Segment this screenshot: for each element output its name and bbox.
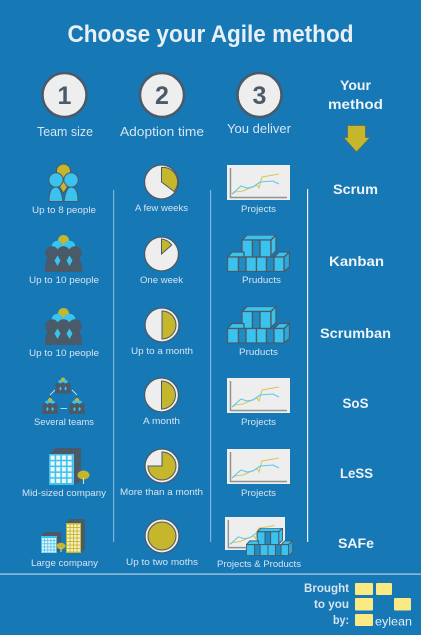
label: up to a month: Up to a month: [131, 346, 193, 357]
footer credit text: by:: [333, 613, 349, 627]
step 2: adoption time heading: [120, 73, 204, 139]
label: up to 8 people: Up to 8 people: [32, 205, 96, 216]
label: pruducts: Pruducts: [242, 275, 281, 286]
icon: up to 8 people: [49, 164, 78, 202]
icon: up to 10 people: [45, 235, 82, 272]
footer credit text: to you: [314, 597, 349, 611]
icon: several teams: [42, 378, 85, 414]
pie: more than a month: [145, 449, 179, 483]
method: sos: SoS: [342, 395, 368, 411]
method: kanban: Kanban: [329, 253, 384, 269]
pie: one week: [144, 237, 178, 271]
title: Choose your Agile method: [68, 21, 354, 48]
logo: eylean: eylean: [375, 614, 412, 628]
method: less: LeSS: [340, 465, 373, 481]
your method heading: [328, 77, 383, 112]
label: projects and products: Projects & Products: [217, 559, 301, 570]
step 2: adoption time heading: Adoption time: [120, 124, 204, 139]
label: one week: One week: [140, 275, 183, 286]
label: up to two moths: Up to two moths: [126, 557, 198, 568]
label: large company: Large company: [31, 558, 98, 569]
label: projects (less): Projects: [241, 488, 276, 499]
footer credit text: [304, 581, 349, 627]
chart icon: less projects: [227, 449, 290, 484]
label: up to 10 people (second): Up to 10 people: [29, 348, 99, 359]
pie: up to a month: [145, 308, 179, 342]
arrow: down to methods: [344, 126, 370, 152]
method: scrum: Scrum: [333, 181, 378, 197]
label: projects (sos): Projects: [241, 417, 276, 428]
label: several teams: Several teams: [34, 417, 94, 428]
label: a few weeks: A few weeks: [135, 203, 188, 214]
step 1: team size heading: [37, 73, 93, 139]
method: safe: SAFe: [338, 535, 374, 551]
icon: mid-sized company: [49, 448, 90, 485]
step 1: team size heading: Team size: [37, 124, 93, 139]
step 3: you deliver heading: You deliver: [227, 121, 292, 136]
icon: up to 10 people (second): [45, 308, 82, 345]
icon: projects and products: [225, 517, 293, 556]
your method heading: method: [328, 96, 383, 112]
method: scrumban: Scrumban: [320, 325, 391, 341]
pie: a few weeks: [144, 165, 178, 199]
label: projects: Projects: [241, 204, 276, 215]
pie: up to two months: [145, 519, 179, 553]
logo: eylean: [355, 583, 412, 628]
label: up to 10 people: Up to 10 people: [29, 275, 99, 286]
footer credit text: Brought: [304, 581, 349, 595]
step 3: you deliver heading: 3: [253, 82, 266, 110]
label: more than a month: More than a month: [120, 487, 203, 498]
boxes icon: kanban products: [228, 235, 290, 272]
label: pruducts (second): Pruducts: [239, 347, 278, 358]
boxes icon: scrumban products: [228, 306, 290, 343]
icon: large company: [41, 519, 85, 553]
label: a month: A month: [143, 416, 180, 427]
chart icon: scrum projects: [227, 165, 290, 200]
step 1: team size heading: 1: [58, 82, 72, 110]
pie: a month: [144, 378, 178, 412]
chart icon: sos projects: [227, 378, 290, 413]
label: mid-sized company: Mid-sized company: [22, 488, 106, 499]
step 2: adoption time heading: 2: [155, 82, 169, 110]
your method heading: Your: [340, 77, 372, 93]
step 3: you deliver heading: [227, 73, 292, 136]
